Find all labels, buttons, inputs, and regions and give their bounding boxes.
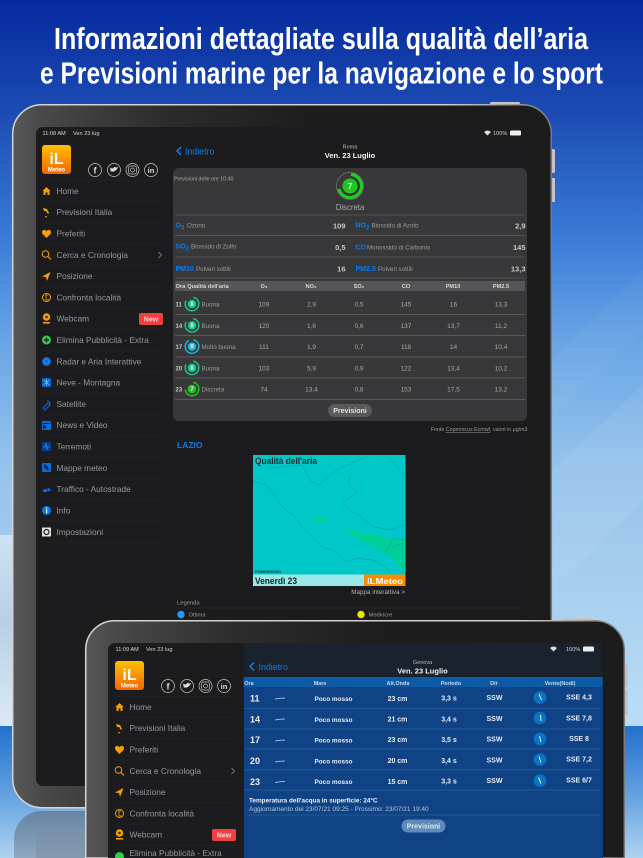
pollutant summary: PM10 [176, 266, 194, 273]
row 11: Buona [202, 302, 220, 308]
row 17: Poco mosso [314, 738, 353, 744]
panel: marine table: Dir [490, 681, 499, 687]
row 14: Buona [202, 323, 220, 330]
row 23: SSW [487, 778, 503, 785]
row 23: 74 [260, 386, 268, 394]
tablet: air quality [13, 102, 555, 808]
row 17 [250, 733, 589, 745]
row 14: 13,7 [447, 323, 460, 330]
row 11: SSE 4,3 [566, 694, 592, 702]
gauge: index 7: 7 [348, 181, 353, 191]
row 14: 11,2 [495, 323, 507, 330]
logo [115, 661, 144, 690]
row 20: SSE 7,2 [566, 756, 592, 764]
row 20: Poco mosso [314, 758, 353, 766]
title [40, 21, 603, 90]
social icons [88, 164, 158, 176]
status time: 11:09 AM [116, 647, 139, 653]
menu labels: Previsioni Italia [56, 207, 113, 217]
row 20: 20 cm [388, 758, 407, 765]
screen [108, 643, 602, 858]
row 17: Molto buona [202, 344, 236, 351]
gauge: index 7 [336, 172, 364, 200]
menu labels: Webcam [130, 830, 162, 840]
navigation header: 100% [566, 647, 580, 653]
pollutant summary: 2 [186, 246, 190, 252]
row 11: 8 [190, 302, 194, 308]
pollutant summary: 109 [333, 222, 346, 230]
screen [36, 127, 530, 786]
legend [177, 600, 522, 618]
table: hourly air quality: O₃ [261, 284, 268, 290]
row 11: 2,9 [307, 302, 316, 308]
pollutant summary: 13,3 [511, 264, 526, 274]
row 14: SSW [487, 716, 503, 723]
row 14: Poco mosso [314, 717, 353, 724]
row 17: 23 cm [388, 737, 407, 744]
pollutant summary: Polveri sottili [378, 266, 413, 273]
status bar: 11:08 AM [42, 131, 66, 137]
menu labels: Confronta località [56, 292, 121, 302]
row 20: 8 [190, 366, 194, 372]
panel: air quality card: Previsioni delle ore 10:40 [174, 176, 234, 182]
pollutant summary: 0,5 [335, 243, 346, 252]
row 17: SSW [487, 736, 503, 744]
row 14 [250, 712, 592, 724]
row 23: Discreta [202, 386, 225, 394]
table: hourly air quality: PM2.5 [493, 284, 509, 290]
water temperature note: Temperatura dell'acqua in superficie: 24°C [249, 796, 378, 804]
menu labels: Home [56, 186, 79, 196]
menu labels [130, 702, 222, 858]
navigation header: Genova [413, 660, 433, 666]
row 20: 10,2 [495, 365, 508, 372]
map: air quality Lazio: iLMeteo [367, 577, 403, 586]
row 11: 11 [250, 694, 260, 704]
row 11: 3,3 s [441, 696, 457, 702]
menu labels: Confronta località [130, 808, 194, 818]
row 14: 137 [401, 323, 412, 330]
button: previsioni [328, 404, 372, 417]
tablet body [13, 105, 551, 808]
row 11: Poco mosso [314, 696, 353, 703]
row 11: 11 [176, 302, 183, 308]
menu labels: Mappe meteo [56, 463, 108, 473]
map: air quality Lazio [253, 455, 406, 587]
water temperature note [249, 796, 429, 813]
pollutant summary: Ozono [187, 222, 206, 230]
reflection of first tablet [14, 811, 96, 858]
table: hourly air quality: PM10 [446, 284, 460, 290]
row 14: 8 [190, 324, 194, 330]
menu labels: News e Video [56, 420, 108, 430]
menu labels: Previsioni Italia [130, 723, 186, 733]
navigation header: Indietro [258, 662, 288, 672]
navigation header [177, 144, 376, 160]
table: hourly air quality: CO [402, 284, 411, 290]
row 20: 5,9 [307, 365, 316, 372]
panel: air quality card: Discreta [336, 203, 365, 212]
menu labels [56, 186, 149, 537]
table: hourly air quality: Qualità dell'aria [187, 284, 230, 290]
row 14: SSE 7,8 [566, 716, 592, 722]
pollutant summary: SO [176, 244, 186, 250]
water temperature note: Aggiornamento del 23/07/21 09:25 - Prossimo: 23/07/21 19:40 [249, 806, 429, 813]
menu icons [42, 187, 51, 536]
pollutant summary: 2,9 [515, 222, 526, 230]
menu labels: Webcam [56, 314, 89, 324]
table: hourly air quality [175, 281, 525, 400]
row 14: 14 [250, 714, 260, 724]
panel: marine table: Periodo [441, 681, 462, 687]
pollutant summary: 16 [337, 264, 346, 274]
menu labels: Satellite [56, 399, 86, 409]
status bar [42, 130, 521, 137]
social icons: f [166, 682, 170, 692]
pollutant summary: 2 [366, 226, 370, 232]
row 14: 14 [176, 324, 183, 330]
social icons: in [148, 166, 155, 175]
tablet buttons [563, 618, 628, 715]
row 17: 17 [176, 345, 183, 351]
row 11 [250, 691, 592, 704]
tablet buttons [490, 102, 555, 202]
panel: marine table: Alt.Onda [387, 681, 410, 687]
menu labels: Posizione [56, 271, 93, 281]
row 17: 3,5 s [441, 737, 457, 744]
link: mappa interattiva: Mappa interattiva > [351, 589, 405, 596]
row 14: 1,6 [307, 323, 316, 330]
row 17: 9 [190, 345, 194, 351]
navigation header: Ven. 23 Luglio [397, 666, 448, 676]
row 23 [250, 774, 592, 787]
row 11 [176, 296, 508, 312]
row 23: SSE 6/7 [566, 778, 592, 784]
social icons: f [94, 166, 98, 176]
row 17: SSE 8 [569, 736, 589, 743]
table: hourly air quality: NO₂ [306, 284, 317, 290]
row 20: Buona [202, 365, 220, 372]
map: air quality Lazio: Qualità dell'aria [255, 456, 317, 466]
source note: Fonte Copernicus Ecmwf, valori in µg/m3 [431, 427, 528, 433]
menu labels: Impostazioni [56, 527, 103, 537]
row 11: SSW [487, 695, 503, 702]
row 23 [176, 381, 508, 397]
row 14: 21 cm [388, 716, 407, 724]
row 23: Poco mosso [314, 779, 353, 786]
pollutant summary [176, 222, 526, 274]
row 14 [176, 317, 507, 333]
row 23: 23 [250, 777, 260, 787]
row 23: 13,2 [495, 386, 508, 394]
row 17 [176, 339, 508, 354]
row 17: 118 [401, 344, 412, 351]
row 20: 20 [176, 366, 183, 372]
button: previsioni [402, 820, 446, 832]
pollutant summary: CO [356, 244, 367, 252]
menu dividers [115, 696, 236, 846]
social icons [162, 680, 230, 692]
row 23: 0,8 [354, 386, 364, 394]
navigation header: Indietro [185, 146, 214, 156]
row 20: 20 [250, 756, 260, 766]
row 23: 23 [176, 388, 183, 394]
new badge [139, 313, 163, 325]
pollutant summary: PM2.5 [356, 266, 376, 273]
navigation header: Roma [343, 144, 358, 150]
pollutant summary: NO [356, 222, 366, 230]
row 17: 14 [450, 344, 457, 351]
status time [116, 647, 172, 653]
row 20: SSW [487, 758, 503, 764]
menu labels: Info [56, 506, 71, 516]
pollutant summary: O [176, 222, 181, 230]
pollutant summary: Monossido di Carbonio [367, 244, 431, 252]
row 17: 0,7 [354, 344, 364, 351]
row 23: 15 cm [388, 779, 407, 786]
row 20: 103 [259, 365, 270, 372]
row 11: 13,3 [495, 302, 508, 308]
table: hourly air quality: Ora [176, 284, 186, 290]
menu labels: Neve - Montagna [56, 378, 121, 388]
status bar: Ven 23 lug [73, 131, 99, 137]
pollutant dividers [175, 215, 525, 278]
menu labels: Home [130, 702, 152, 712]
map: air quality Lazio: POMERIGGIO [255, 569, 281, 574]
menu labels: Preferiti [130, 744, 158, 754]
row 20 [176, 360, 508, 376]
menu labels: Radar e Aria Interattive [56, 356, 142, 366]
row 20 [250, 753, 592, 766]
legend: Legenda [177, 600, 200, 606]
row 23: 153 [401, 386, 412, 394]
social icons: in [221, 682, 228, 691]
tablet body [86, 621, 624, 858]
menu labels: Traffico - Autostrade [56, 484, 131, 494]
logo: Meteo [48, 168, 65, 174]
new badge [212, 829, 236, 841]
legend: Mediocre [368, 612, 392, 618]
menu icons [115, 703, 124, 858]
row 17: 111 [259, 344, 269, 351]
pollutant summary: Biossido di Zolfo [191, 244, 237, 250]
menu labels: Elimina Pubblicità - Extra [56, 335, 149, 345]
legend: Ottima [188, 612, 206, 618]
status time: Ven 23 lug [146, 647, 172, 653]
row 11: 145 [401, 302, 412, 308]
row 17: 10,4 [495, 344, 508, 351]
row 11: 23 cm [388, 696, 407, 703]
sidebar menu [42, 145, 163, 542]
menu labels: Terremoti [56, 442, 91, 452]
menu labels: Cerca e Cronologia [56, 250, 128, 260]
row 20: 0,9 [354, 365, 364, 372]
logo: iL [49, 151, 64, 168]
chevron [232, 768, 234, 774]
pollutant summary: Biossido di Azoto [372, 222, 419, 230]
menu labels: Preferiti [56, 228, 85, 238]
heading: Lazio: LAZIO [177, 440, 203, 450]
row 11: 109 [259, 302, 270, 308]
row 23: 13,4 [305, 386, 318, 394]
row 14: 0,6 [354, 323, 364, 330]
menu dividers [42, 180, 163, 542]
row 14: 3,4 s [441, 716, 457, 724]
new badge: New [144, 316, 159, 324]
sidebar menu [115, 647, 236, 858]
panel: marine table: Mare [314, 681, 326, 687]
row 17: 17 [250, 735, 260, 745]
pollutant summary: Polveri sottili [196, 266, 231, 273]
menu labels: Cerca e Cronologia [130, 766, 201, 776]
row 14: 120 [259, 323, 270, 330]
row 11: 16 [450, 302, 457, 308]
row 20: 3,4 s [441, 758, 457, 765]
logo: iL [122, 667, 137, 684]
row 11: 0,5 [354, 302, 364, 308]
row 23: 3,3 s [441, 778, 457, 786]
panel: marine table: Vento(Nodi) [545, 681, 576, 687]
new badge: New [217, 832, 232, 840]
button: previsioni: Previsioni [333, 408, 367, 415]
map: air quality Lazio: Venerdì 23 [255, 576, 297, 587]
menu labels: Elimina Pubblicità - Extra [130, 848, 222, 858]
row 20: 122 [401, 365, 412, 372]
navigation header [244, 643, 602, 677]
row 23: 17,5 [447, 386, 460, 394]
pollutant summary: 3 [181, 226, 185, 232]
table: hourly air quality: SO₂ [354, 284, 365, 290]
chevron [158, 252, 162, 258]
row 17: 1,9 [307, 344, 316, 351]
panel: marine table [244, 677, 603, 858]
logo: Meteo [121, 684, 138, 690]
tablet: marine forecast [86, 618, 628, 858]
row 20: 13,4 [447, 365, 460, 372]
row 23: 7 [190, 387, 194, 393]
panel: marine table: Ora [244, 681, 255, 687]
button: previsioni: Previsioni [407, 824, 440, 830]
status bar: 100% [493, 131, 507, 137]
navigation header: Ven. 23 Luglio [325, 151, 376, 160]
logo [42, 145, 71, 174]
menu labels: Posizione [130, 787, 166, 797]
pollutant summary: 145 [513, 243, 526, 252]
panel: air quality card [173, 168, 527, 421]
